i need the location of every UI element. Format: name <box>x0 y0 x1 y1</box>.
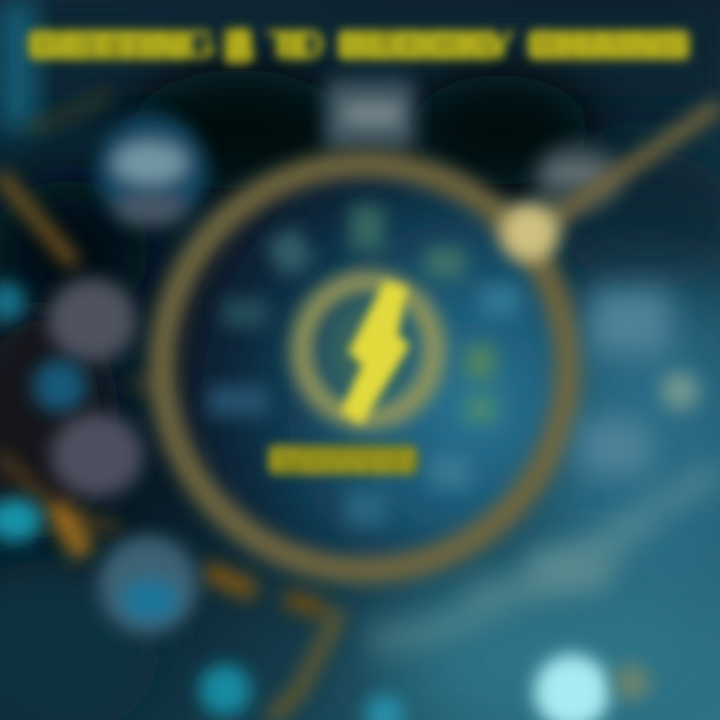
right side text blocks <box>530 290 670 590</box>
node: teal middle <box>33 359 87 413</box>
dot: olive <box>614 664 650 700</box>
dot: bottom center cyan <box>365 695 405 720</box>
node: grey upper <box>48 278 136 362</box>
magnifier lens <box>167 169 563 565</box>
brown connector lines <box>0 95 340 720</box>
dot: bright pale cyan <box>534 654 610 720</box>
node: teal edge <box>0 282 26 322</box>
icon: lightning bolt <box>340 280 410 425</box>
left side nodes <box>0 278 143 542</box>
pale flowing curves lower right <box>370 470 720 640</box>
lower left circle node <box>98 535 198 635</box>
node top right <box>533 143 623 213</box>
node: grey lower <box>51 413 143 497</box>
dot: right pale <box>660 371 700 411</box>
lens label: Power <box>267 439 417 481</box>
circle node top left <box>97 115 207 226</box>
dot: lower cyan <box>199 664 251 716</box>
lens spokes <box>208 205 520 526</box>
top center node <box>325 80 415 150</box>
handle knob <box>500 202 560 262</box>
cyan dots bottom <box>199 371 700 720</box>
lens emblem <box>302 280 434 425</box>
magnifier ring <box>162 164 568 570</box>
magnifier handle <box>545 105 720 225</box>
node: cyan edge <box>0 498 43 542</box>
title: GETTING A TO BLOCKY CHAINS <box>28 23 688 67</box>
